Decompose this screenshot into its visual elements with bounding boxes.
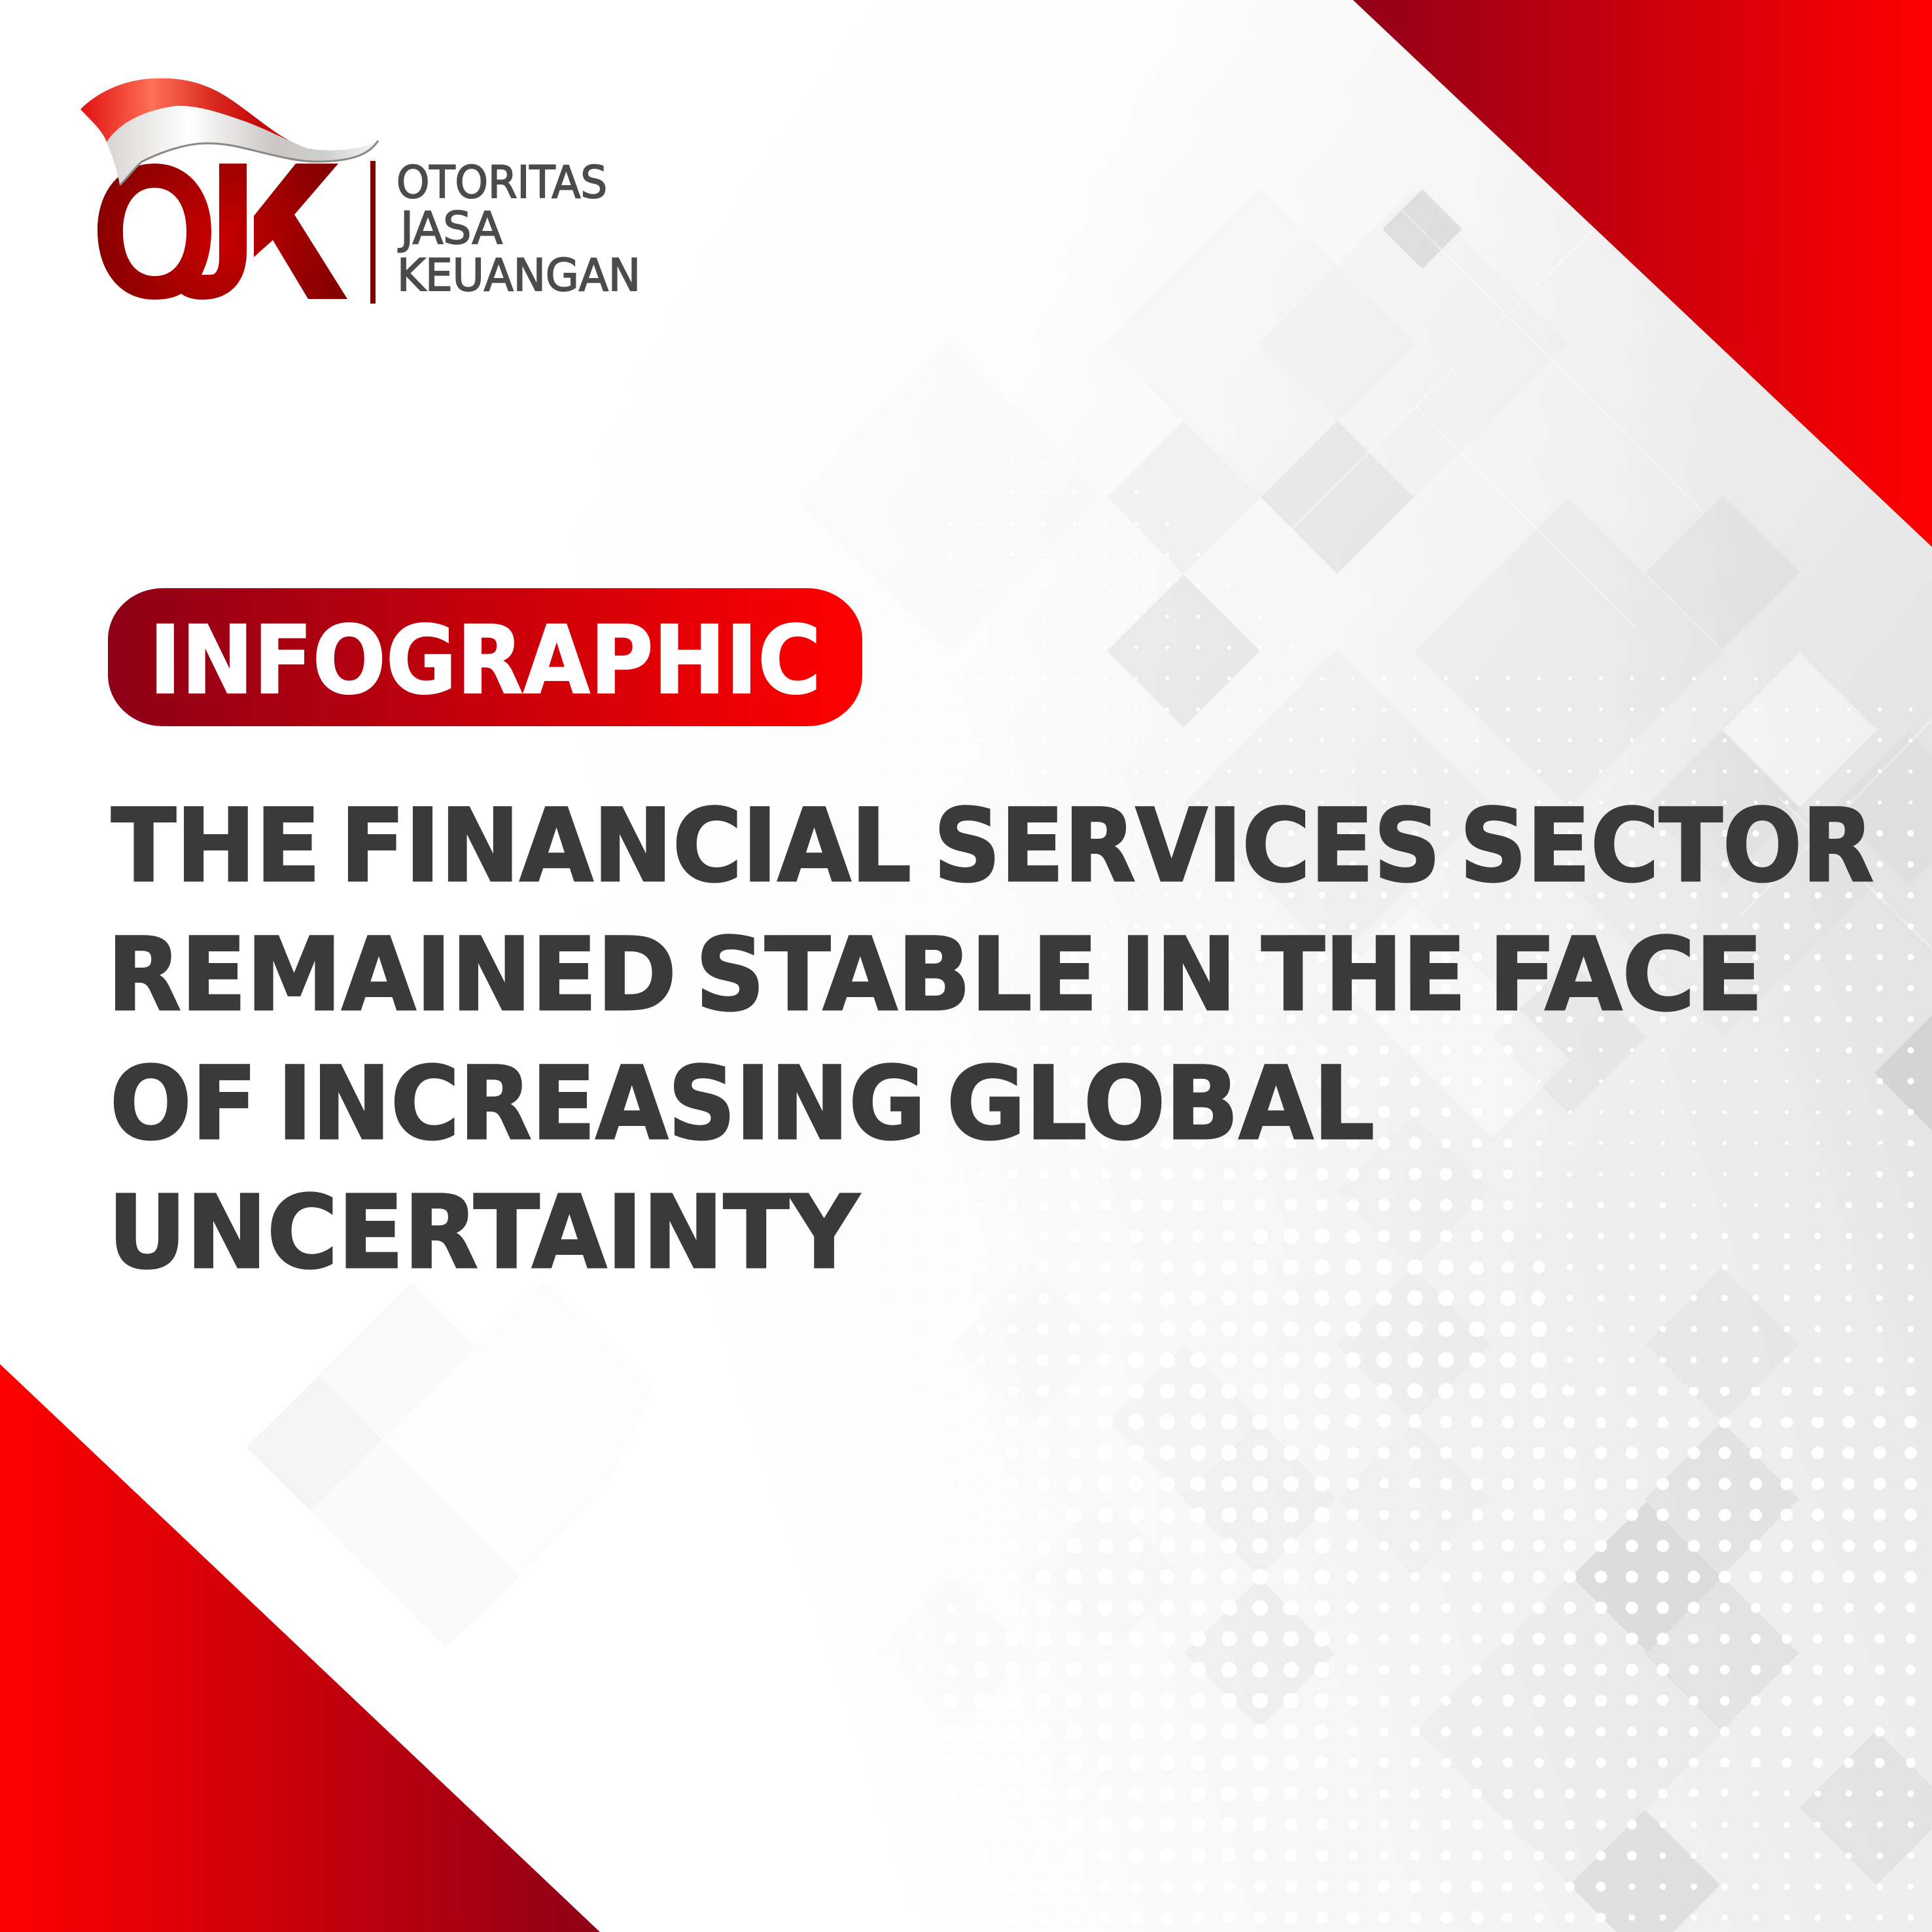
icon: red and white flag (80, 79, 378, 185)
halftone dot field (720, 458, 1932, 1932)
title: STABLE (695, 917, 1098, 1034)
title: REMAINED (107, 917, 676, 1034)
title: INCREASING (277, 1045, 926, 1163)
title: FACE (1488, 917, 1763, 1034)
red triangle: bottom left corner (0, 1364, 600, 1932)
title: FINANCIAL (340, 788, 911, 905)
title: SERVICES (934, 788, 1441, 905)
wordmark: Otoritas Jasa Keuangan (396, 157, 641, 302)
wordmark: Otoritas Jasa Keuangan: JASA (398, 203, 502, 255)
title: SECTOR (1460, 788, 1874, 905)
title: THE (111, 788, 321, 905)
title: UNCERTAINTY (108, 1174, 860, 1291)
title: GLOBAL (947, 1045, 1375, 1163)
OJK logo (80, 79, 641, 304)
title: THE (1261, 917, 1466, 1034)
wordmark: Otoritas Jasa Keuangan: KEUANGAN (397, 250, 641, 302)
thin highlight lines (0, 210, 1932, 1583)
diamond mosaic pattern (246, 189, 1932, 1932)
divider (370, 161, 376, 304)
lighter diamond panels (1336, 653, 1877, 1138)
title (107, 788, 1874, 1291)
red triangle: top right corner (1353, 0, 1932, 547)
title: IN (1120, 917, 1237, 1034)
badge: INFOGRAPHIC: INFOGRAPHIC (149, 605, 821, 715)
title: OF (110, 1045, 257, 1163)
icon: OJK letter mark (97, 164, 347, 300)
wordmark: Otoritas Jasa Keuangan: OTORITAS (396, 157, 607, 209)
